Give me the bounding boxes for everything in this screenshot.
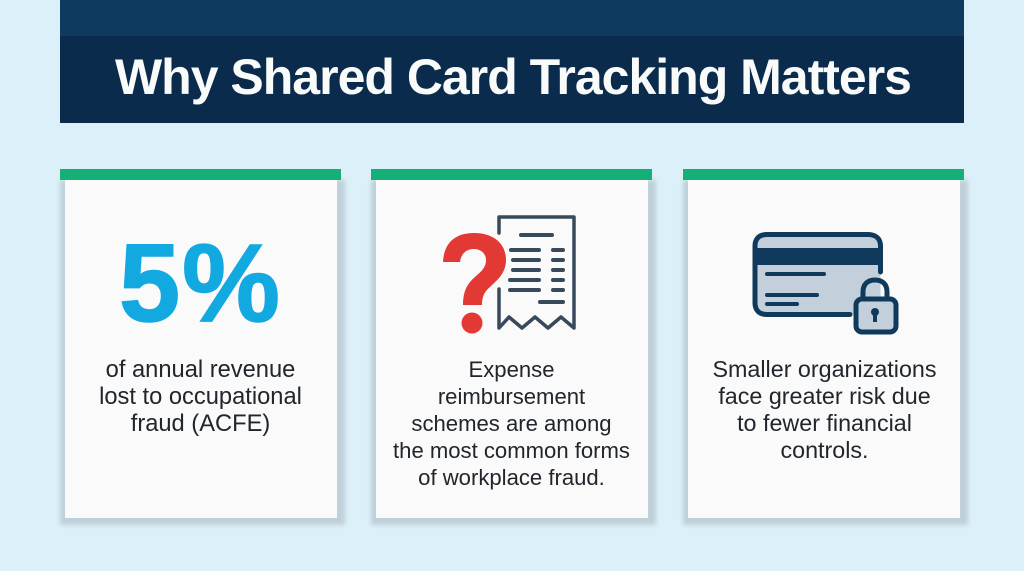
expense text: [393, 357, 630, 490]
header banner: [60, 0, 964, 123]
icon: receipt with question mark: [443, 215, 576, 334]
expense text: reimbursement: [438, 384, 585, 409]
revenue text: [99, 357, 302, 437]
revenue text: lost to occupational: [99, 384, 302, 410]
risk text: face greater risk due: [718, 383, 931, 409]
expense text: the most common forms: [393, 438, 630, 463]
header upper band: [60, 0, 964, 36]
revenue text: of annual revenue: [106, 357, 295, 383]
panel: revenue lost: [58, 169, 346, 526]
title: Why Shared Card Tracking Matters: [115, 49, 911, 105]
panel: smaller organizations: [682, 169, 970, 526]
expense text: of workplace fraud.: [418, 465, 605, 490]
risk text: [712, 356, 937, 463]
expense text: Expense: [468, 357, 554, 382]
revenue text: fraud (ACFE): [131, 411, 270, 437]
big statistic: 5%: [119, 222, 282, 345]
expense text: schemes are among: [411, 411, 612, 436]
risk text: controls.: [780, 437, 869, 463]
icon: credit card with padlock: [752, 232, 898, 334]
risk text: Smaller organizations: [712, 356, 937, 382]
panel: expense schemes: [370, 169, 658, 526]
risk text: to fewer financial: [737, 410, 912, 436]
